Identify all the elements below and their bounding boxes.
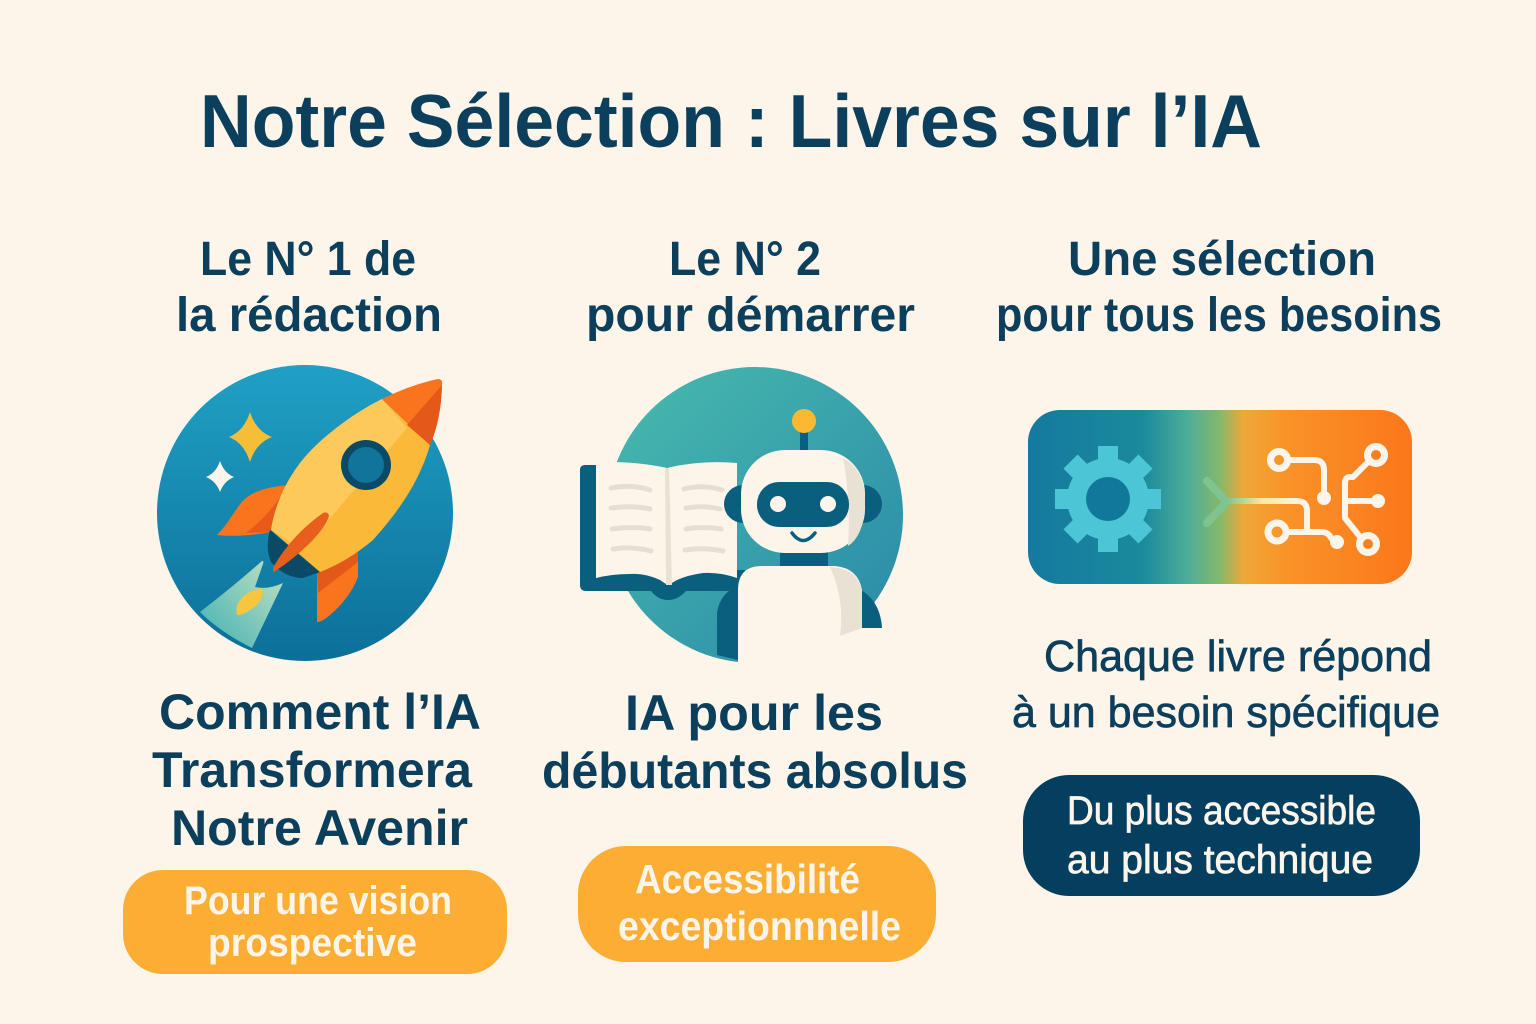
book title 1 bbox=[152, 684, 481, 856]
column 2 heading: pour démarrer bbox=[586, 289, 915, 342]
callout: exceptional accessibility: Accessibilité bbox=[635, 856, 860, 902]
book cover bbox=[580, 465, 745, 600]
column 1 heading bbox=[176, 233, 442, 342]
robot body bbox=[738, 566, 892, 672]
fin left bbox=[217, 485, 290, 536]
book title 1: Notre Avenir bbox=[171, 800, 468, 856]
rocket body bbox=[271, 399, 430, 572]
column 3 heading: Une sélection bbox=[1068, 233, 1376, 286]
center fin bbox=[273, 512, 329, 572]
exhaust flame bbox=[200, 561, 283, 648]
column 2 heading bbox=[586, 233, 915, 342]
antenna bbox=[792, 409, 816, 452]
book pages bbox=[596, 462, 737, 585]
icon: robot reading a book bbox=[580, 367, 903, 672]
book title 1: Transformera bbox=[152, 742, 473, 798]
callout: most accessible to most technical: Du plus accessible bbox=[1067, 789, 1376, 833]
book title 2 bbox=[542, 685, 968, 799]
book title 1: Comment l’IA bbox=[159, 684, 481, 740]
fin right bbox=[317, 550, 358, 622]
robot neck bbox=[780, 550, 828, 570]
star yellow bbox=[229, 412, 272, 462]
column 3 heading: pour tous les besoins bbox=[996, 289, 1442, 342]
text block: every book answers a need: Chaque livre répond bbox=[1044, 632, 1432, 681]
book title 2: débutants absolus bbox=[542, 743, 968, 799]
robot head bbox=[741, 450, 865, 553]
callout: most accessible to most technical bbox=[1023, 775, 1420, 896]
robot face bbox=[757, 482, 849, 540]
book title 2: IA pour les bbox=[625, 685, 883, 741]
column 1 heading: la rédaction bbox=[176, 289, 442, 342]
column 3 heading bbox=[996, 233, 1442, 342]
icon: circuit bbox=[1207, 446, 1384, 552]
star white bbox=[206, 461, 234, 492]
robot arms bbox=[717, 585, 882, 660]
title: Notre Sélection : Livres sur l’IA bbox=[200, 79, 1262, 163]
rocket nose bbox=[382, 379, 442, 445]
callout: prospective vision bbox=[123, 870, 507, 974]
porthole bbox=[341, 440, 391, 490]
icon: gear bbox=[1055, 446, 1161, 552]
text block: every book answers a need bbox=[1012, 632, 1440, 737]
callout: prospective vision: prospective bbox=[208, 921, 417, 965]
callout: exceptional accessibility bbox=[578, 846, 936, 962]
rocket base bbox=[268, 530, 320, 578]
callout: exceptional accessibility: exceptionnnelle bbox=[618, 903, 901, 949]
icon: rocket bbox=[157, 365, 453, 661]
text block: every book answers a need: à un besoin spécifique bbox=[1012, 688, 1440, 737]
column 1 heading: Le N° 1 de bbox=[200, 233, 416, 286]
robot ears bbox=[724, 485, 882, 523]
panel: gear to circuit gradient bbox=[1028, 410, 1412, 584]
callout: prospective vision: Pour une vision bbox=[184, 879, 452, 923]
callout: most accessible to most technical: au plus technique bbox=[1067, 838, 1373, 882]
column 2 heading: Le N° 2 bbox=[669, 233, 821, 286]
